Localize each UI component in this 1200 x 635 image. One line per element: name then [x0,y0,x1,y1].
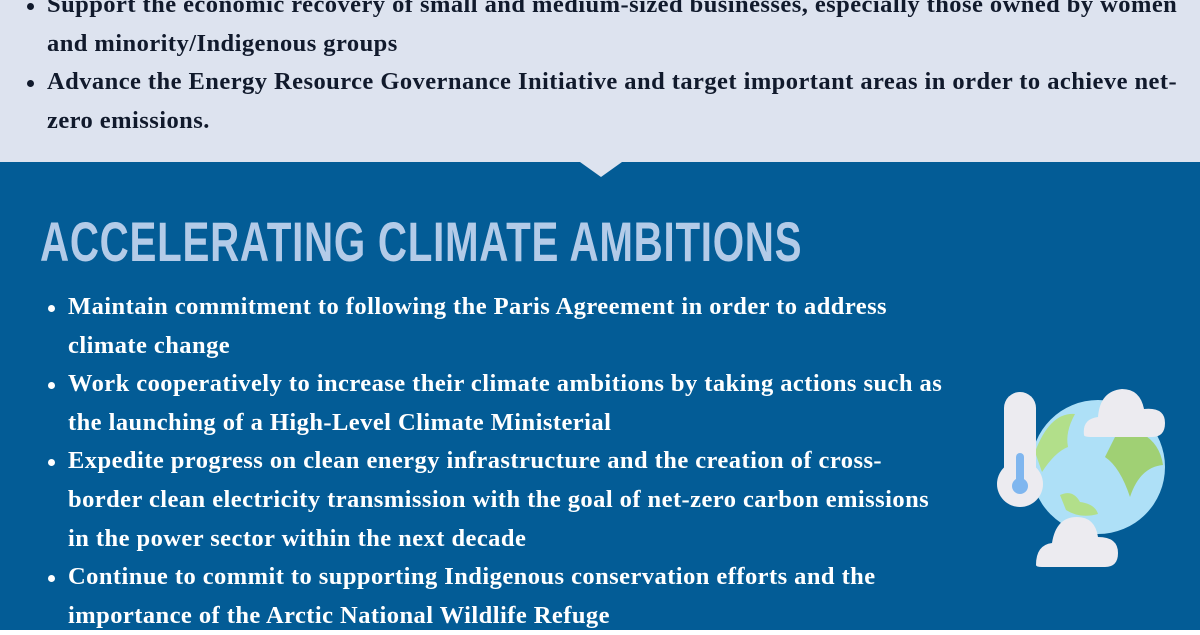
text block: climate bullets: the launching of a High-Level Climate Ministerial [68,409,611,436]
text block: climate bullets: Work cooperatively to increase their climate ambitions by taking actions such as [68,370,942,397]
panel: top light section [0,0,1200,162]
panel: climate ambitions [0,162,1200,630]
text block: climate bullets: climate change [68,332,230,359]
text block: top bullet list [27,0,1177,134]
text block: climate bullets: Maintain commitment to following the Paris Agreement in order to address [68,293,887,320]
text block: climate bullets: Continue to commit to supporting Indigenous conservation efforts and the [68,563,876,590]
text block: top bullet list: zero emissions. [47,107,210,134]
text block: climate bullets: in the power sector within the next decade [68,525,526,552]
text block: climate bullets: importance of the Arctic National Wildlife Refuge [68,602,610,629]
text block: climate bullets: Expedite progress on clean energy infrastructure and the creation of cross- [68,447,882,474]
text block: top bullet list: and minority/Indigenous groups [47,30,398,57]
icon: earth with thermometer and clouds [997,389,1165,567]
heading: ACCELERATING CLIMATE AMBITIONS [40,210,802,273]
text block: climate bullets [48,293,942,629]
text block: climate bullets: border clean electricity transmission with the goal of net-zero carbon emissions [68,486,929,513]
arrow: pointer triangle [580,162,622,177]
text block: top bullet list: Advance the Energy Resource Governance Initiative and target important areas in order to achieve net- [47,68,1177,95]
